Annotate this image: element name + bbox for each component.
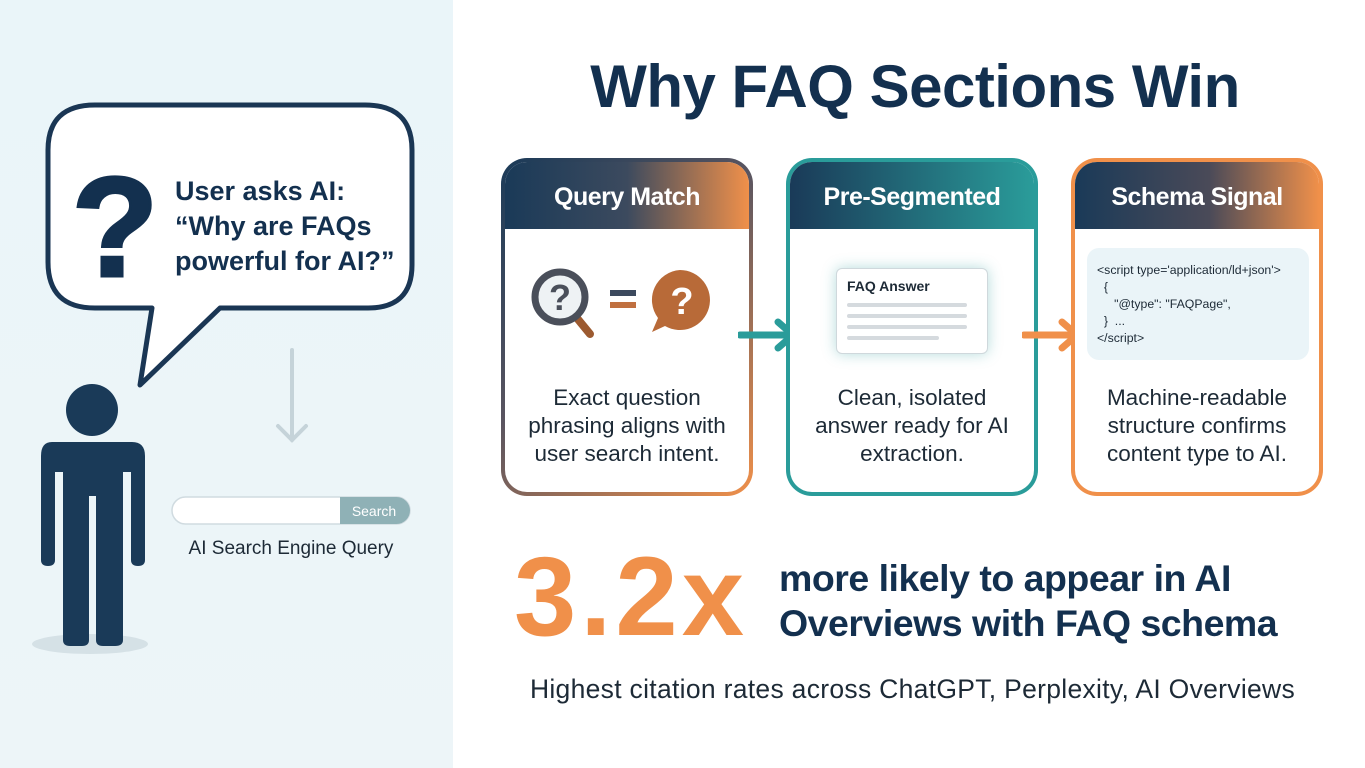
header: Pre-Segmented <box>824 183 1000 211</box>
description: answer ready for AI <box>815 413 1009 438</box>
header: Query Match <box>554 183 700 211</box>
description <box>1107 385 1287 466</box>
description: Clean, isolated <box>838 385 986 410</box>
description: structure confirms <box>1108 413 1286 438</box>
description <box>815 385 1009 466</box>
icon: magnifier equals chat bubble: ? <box>670 281 694 323</box>
person figure <box>32 384 148 654</box>
stat text: Overviews with FAQ schema <box>779 602 1277 644</box>
search bar <box>172 497 410 524</box>
description: extraction. <box>860 441 964 466</box>
code block: <script type='application/ld+json'> { "@type": "FAQPage", } ... </script> <box>1097 263 1281 345</box>
search bar: Search <box>352 503 396 519</box>
icon: magnifier equals chat bubble: ? <box>549 277 571 318</box>
icon: FAQ answer card <box>836 268 988 354</box>
description: user search intent. <box>534 441 720 466</box>
description: content type to AI. <box>1107 441 1287 466</box>
card: Pre-Segmented <box>786 158 1038 496</box>
left panel background <box>0 0 453 768</box>
search caption: AI Search Engine Query <box>189 538 394 559</box>
arrow: teal <box>738 318 786 352</box>
left illustration <box>32 102 414 654</box>
header: Schema Signal <box>1111 183 1283 211</box>
icon: big question mark: ? <box>72 148 158 307</box>
bubble text: powerful for AI?” <box>175 246 394 276</box>
bubble text: “Why are FAQs <box>175 211 372 241</box>
description <box>528 385 726 466</box>
icon: FAQ answer card: FAQ Answer <box>847 278 930 294</box>
header <box>1075 162 1319 229</box>
icon: magnifier equals chat bubble <box>532 268 710 338</box>
bubble text: User asks AI: <box>175 176 345 206</box>
arrow: orange <box>1022 318 1071 352</box>
description: phrasing aligns with <box>528 413 726 438</box>
header <box>505 162 749 229</box>
code block <box>1087 248 1309 360</box>
stat text: more likely to appear in AI <box>779 557 1231 599</box>
speech bubble <box>48 105 412 385</box>
arrow down <box>278 350 306 440</box>
big stat: 3.2x <box>514 534 748 659</box>
stat text <box>779 557 1278 644</box>
header <box>790 162 1034 229</box>
card: Schema Signal <box>1071 158 1323 496</box>
title: Why FAQ Sections Win <box>590 53 1240 120</box>
footer line: Highest citation rates across ChatGPT, Perplexity, AI Overviews <box>530 674 1295 704</box>
description: Exact question <box>553 385 701 410</box>
description: Machine-readable <box>1107 385 1287 410</box>
card: Query Match <box>501 158 753 496</box>
